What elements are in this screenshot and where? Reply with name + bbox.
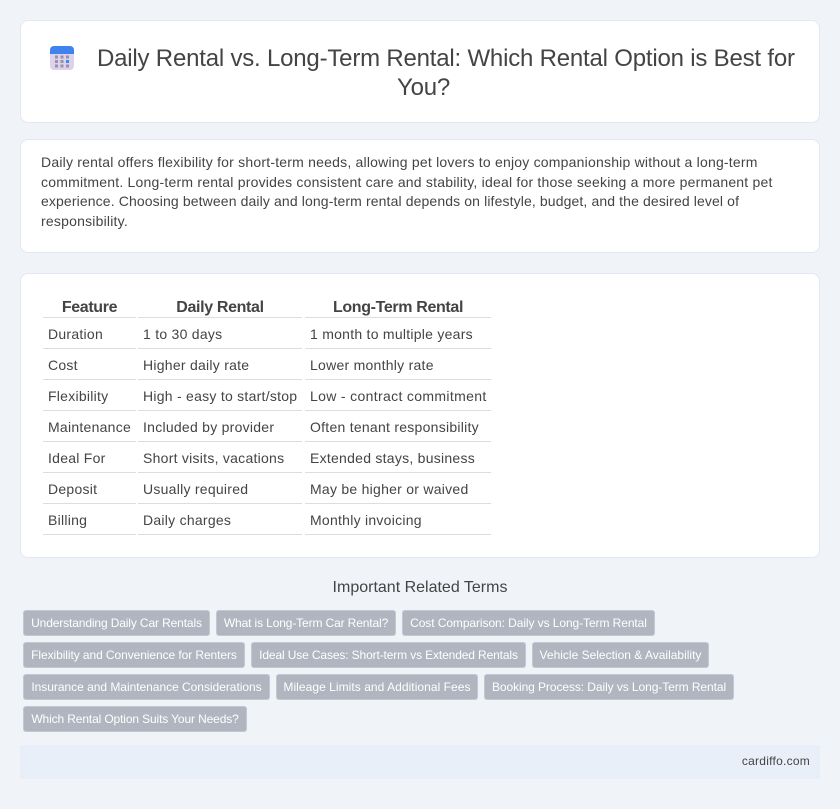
comparison table: May be higher or waived bbox=[310, 481, 469, 497]
footer bar bbox=[20, 745, 820, 779]
title: You? bbox=[397, 74, 450, 101]
comparison table: Monthly invoicing bbox=[310, 512, 422, 528]
intro text: Daily rental offers flexibility for short-term needs, allowing pet lovers to enjoy companionship without a long-term bbox=[41, 154, 758, 170]
intro text bbox=[41, 154, 773, 229]
related terms tags: Understanding Daily Car Rentals bbox=[31, 616, 202, 630]
comparison table: 1 month to multiple years bbox=[310, 326, 473, 342]
comparison table: Usually required bbox=[143, 481, 248, 497]
intro text: experience. Choosing between daily and long-term rental depends on lifestyle, budget, and the desired level of bbox=[41, 193, 739, 209]
comparison table: Extended stays, business bbox=[310, 450, 475, 466]
related terms tags: Vehicle Selection & Availability bbox=[540, 648, 701, 662]
comparison table: Lower monthly rate bbox=[310, 357, 434, 373]
comparison table: Duration bbox=[48, 326, 103, 342]
comparison table: Flexibility bbox=[48, 388, 108, 404]
related terms heading: Important Related Terms bbox=[333, 579, 507, 596]
comparison table: Daily charges bbox=[143, 512, 231, 528]
comparison table panel bbox=[20, 273, 820, 558]
comparison table: High - easy to start/stop bbox=[143, 388, 297, 404]
comparison table: Low - contract commitment bbox=[310, 388, 487, 404]
comparison table: Feature bbox=[62, 299, 117, 316]
related terms tags: Mileage Limits and Additional Fees bbox=[283, 680, 471, 694]
intro text: responsibility. bbox=[41, 213, 128, 229]
related terms tags: Which Rental Option Suits Your Needs? bbox=[31, 712, 239, 726]
comparison table: Billing bbox=[48, 512, 87, 528]
comparison table: Daily Rental bbox=[176, 299, 264, 316]
comparison table: Cost bbox=[48, 357, 78, 373]
intro text: commitment. Long-term rental provides consistent care and stability, ideal for those seeking a more permanent pet bbox=[41, 174, 773, 190]
icon: calendar bbox=[50, 46, 74, 70]
related terms tags: Flexibility and Convenience for Renters bbox=[31, 648, 237, 662]
related terms tags: Ideal Use Cases: Short-term vs Extended Rentals bbox=[259, 648, 518, 662]
related terms tags: Booking Process: Daily vs Long-Term Rental bbox=[492, 680, 726, 694]
comparison table: Higher daily rate bbox=[143, 357, 249, 373]
comparison table: 1 to 30 days bbox=[143, 326, 222, 342]
comparison table: Maintenance bbox=[48, 419, 131, 435]
related terms tags: What is Long-Term Car Rental? bbox=[224, 616, 388, 630]
title bbox=[97, 45, 795, 101]
related terms tags: Cost Comparison: Daily vs Long-Term Rental bbox=[410, 616, 647, 630]
related terms tags bbox=[23, 610, 734, 732]
comparison table: Often tenant responsibility bbox=[310, 419, 479, 435]
header panel bbox=[20, 20, 820, 123]
title: Daily Rental vs. Long-Term Rental: Which Rental Option is Best for bbox=[97, 45, 795, 72]
comparison table: Included by provider bbox=[143, 419, 274, 435]
comparison table: Deposit bbox=[48, 481, 97, 497]
comparison table: Ideal For bbox=[48, 450, 106, 466]
footer source: cardiffo.com bbox=[742, 754, 810, 768]
comparison table: Long-Term Rental bbox=[333, 299, 463, 316]
related terms tags: Insurance and Maintenance Considerations bbox=[31, 680, 262, 694]
intro panel bbox=[20, 139, 820, 253]
comparison table: Short visits, vacations bbox=[143, 450, 284, 466]
